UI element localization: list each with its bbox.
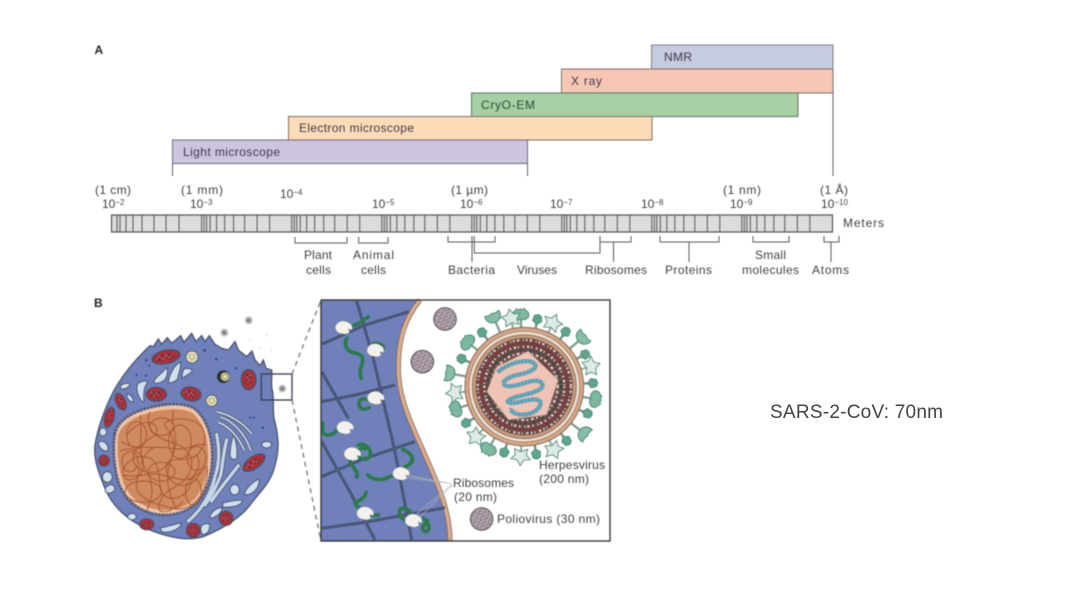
magnifier box [261,374,292,400]
method bar: CryO-EM: CryO-EM [481,98,535,112]
inset background [321,300,610,541]
scale labels: 10 [460,197,473,211]
size labels: molecules [742,263,799,277]
scale labels: −10 [834,198,848,207]
scale labels: −8 [654,198,664,207]
inset: magnified cell edge [321,300,610,541]
endoplasmic reticulum [188,434,238,521]
scale labels: −4 [293,188,303,197]
brackets: size ranges [295,236,839,262]
poliovirus particles [411,308,493,530]
golgi apparatus [217,412,252,450]
size labels: cells [306,263,331,277]
method bar: X ray: X ray [571,74,602,88]
scale labels: −5 [385,198,395,207]
herpesvirus [444,307,603,466]
scale labels: 10 [280,187,293,201]
scale labels: −6 [473,198,483,207]
size labels: Atoms [812,263,849,277]
scale labels [95,182,848,211]
illustration: cell [95,317,292,539]
size labels: Animal [353,248,394,262]
scale labels: 10 [190,197,203,211]
method bar: NMR: NMR [664,50,692,64]
small vesicles with granules [186,351,230,406]
scale labels: (1 mm) [181,183,223,197]
method bar: Electron microscope: Electron microscope [299,121,414,135]
cytoskeleton filaments [322,301,445,540]
inset labels: Herpesvirus [539,458,605,472]
scale labels: 10 [372,197,385,211]
tegument [478,340,571,433]
size labels: Viruses [517,263,557,277]
method bar: CryO-EM [472,93,798,116]
capsid [487,351,558,420]
size labels: Ribosomes [585,263,647,277]
ribosomes [335,321,422,527]
panel A: resolution scale chart [94,43,884,277]
scale labels: 10 [102,197,115,211]
method bar: Light microscope: Light microscope [183,145,280,159]
ruler: meters log scale [112,215,884,232]
scale labels: (1 Å) [820,182,848,197]
scale labels: −3 [203,198,213,207]
scale labels: −7 [563,198,573,207]
method bar: X ray [562,69,833,93]
scale labels: (1 µm) [451,183,488,197]
scale labels: 10 [550,197,563,211]
inset labels: Poliovirus (30 nm) [497,512,600,526]
ribosome leader lines [406,475,452,518]
method bar: NMR [652,45,833,69]
size labels [304,248,849,277]
inset labels: Ribosomes [453,476,514,490]
scale labels: (1 cm) [95,183,131,197]
nucleus [114,404,212,515]
scale labels: 10 [821,197,834,211]
released virus particles [221,317,286,392]
scale labels: 10 [641,197,654,211]
vesicles [99,362,272,534]
label: A: A [94,43,104,57]
size labels: cells [361,263,386,277]
scale labels: −2 [115,198,125,207]
method bar: Light microscope [172,140,528,164]
method bar: Electron microscope [288,116,652,140]
panel B: cell illustration and magnified inset [94,296,610,541]
size labels: Small [755,248,786,262]
zoom guide lines [292,300,321,541]
inset labels: (200 nm) [539,472,589,486]
scale labels: (1 nm) [723,183,761,197]
annotation: SARS-2-CoV size: SARS-2-CoV: 70nm [770,402,943,423]
ruler: meters log scale: Meters [843,216,884,230]
cytoplasm region [321,300,450,541]
glycoprotein spikes [444,307,603,466]
scale labels: 10 [730,197,743,211]
size labels: Plant [304,248,333,262]
inset labels: (20 nm) [454,490,497,504]
mRNA and protein strands [322,317,429,532]
inset frame [321,300,610,541]
size labels: Bacteria [448,263,495,277]
inset labels [453,458,605,526]
label: B: B [94,296,103,310]
range stems [172,93,833,176]
viral envelope [465,327,584,446]
size labels: Proteins [665,263,712,277]
cell body [95,333,278,539]
mitochondria [98,348,268,537]
viral DNA [498,361,543,415]
scale labels: −9 [743,198,753,207]
cell membrane [398,300,450,541]
cytoplasm granules [136,349,264,429]
